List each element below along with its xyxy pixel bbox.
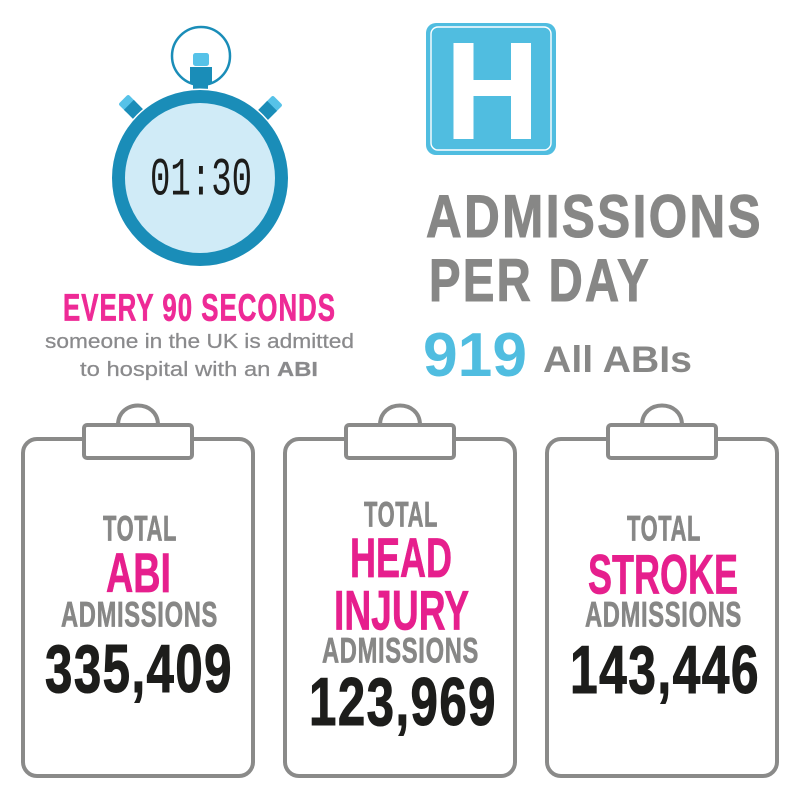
label ABI: ABI [106,541,171,604]
text: admitted to hospital [45,331,354,381]
clipboard outline [23,406,253,776]
clipboard outline [285,406,515,776]
stopwatch face [110,88,290,268]
label admissions: ADMISSIONS [322,632,479,670]
stopwatch left button [118,94,144,120]
label total: TOTAL [627,510,701,548]
number 123,969: 123,969 [309,664,497,740]
stopwatch right button [257,95,283,121]
number 335,409: 335,409 [45,631,233,707]
label head: HEAD [350,526,452,589]
icon: stopwatch [110,27,290,268]
stat: 919 all ABIs: 919 [423,321,527,390]
icon: hospital sign [426,23,556,155]
heading: admissions per day: PER DAY [429,247,651,314]
stopwatch time: 01:30 [150,150,252,211]
stopwatch crown [190,53,212,89]
label total: TOTAL [103,510,177,548]
heading: admissions per day [426,183,763,314]
heading: every 90 seconds: EVERY 90 SECONDS [63,288,336,330]
label admissions: ADMISSIONS [61,596,218,634]
panel: total ABI admissions [23,406,253,776]
stat: 919 all ABIs: All ABIs [543,339,692,380]
panel: total stroke admissions [547,406,777,776]
clipboard outline [547,406,777,776]
stopwatch top ring [172,27,230,85]
panel: total head injury admissions [285,406,515,776]
label injury: INJURY [334,578,469,642]
text: admitted to hospital: to hospital with an ABI [80,359,318,381]
text: admitted to hospital: someone in the UK is admitted [45,331,354,353]
label total: TOTAL [364,496,438,534]
stat: 919 all ABIs [423,321,692,390]
